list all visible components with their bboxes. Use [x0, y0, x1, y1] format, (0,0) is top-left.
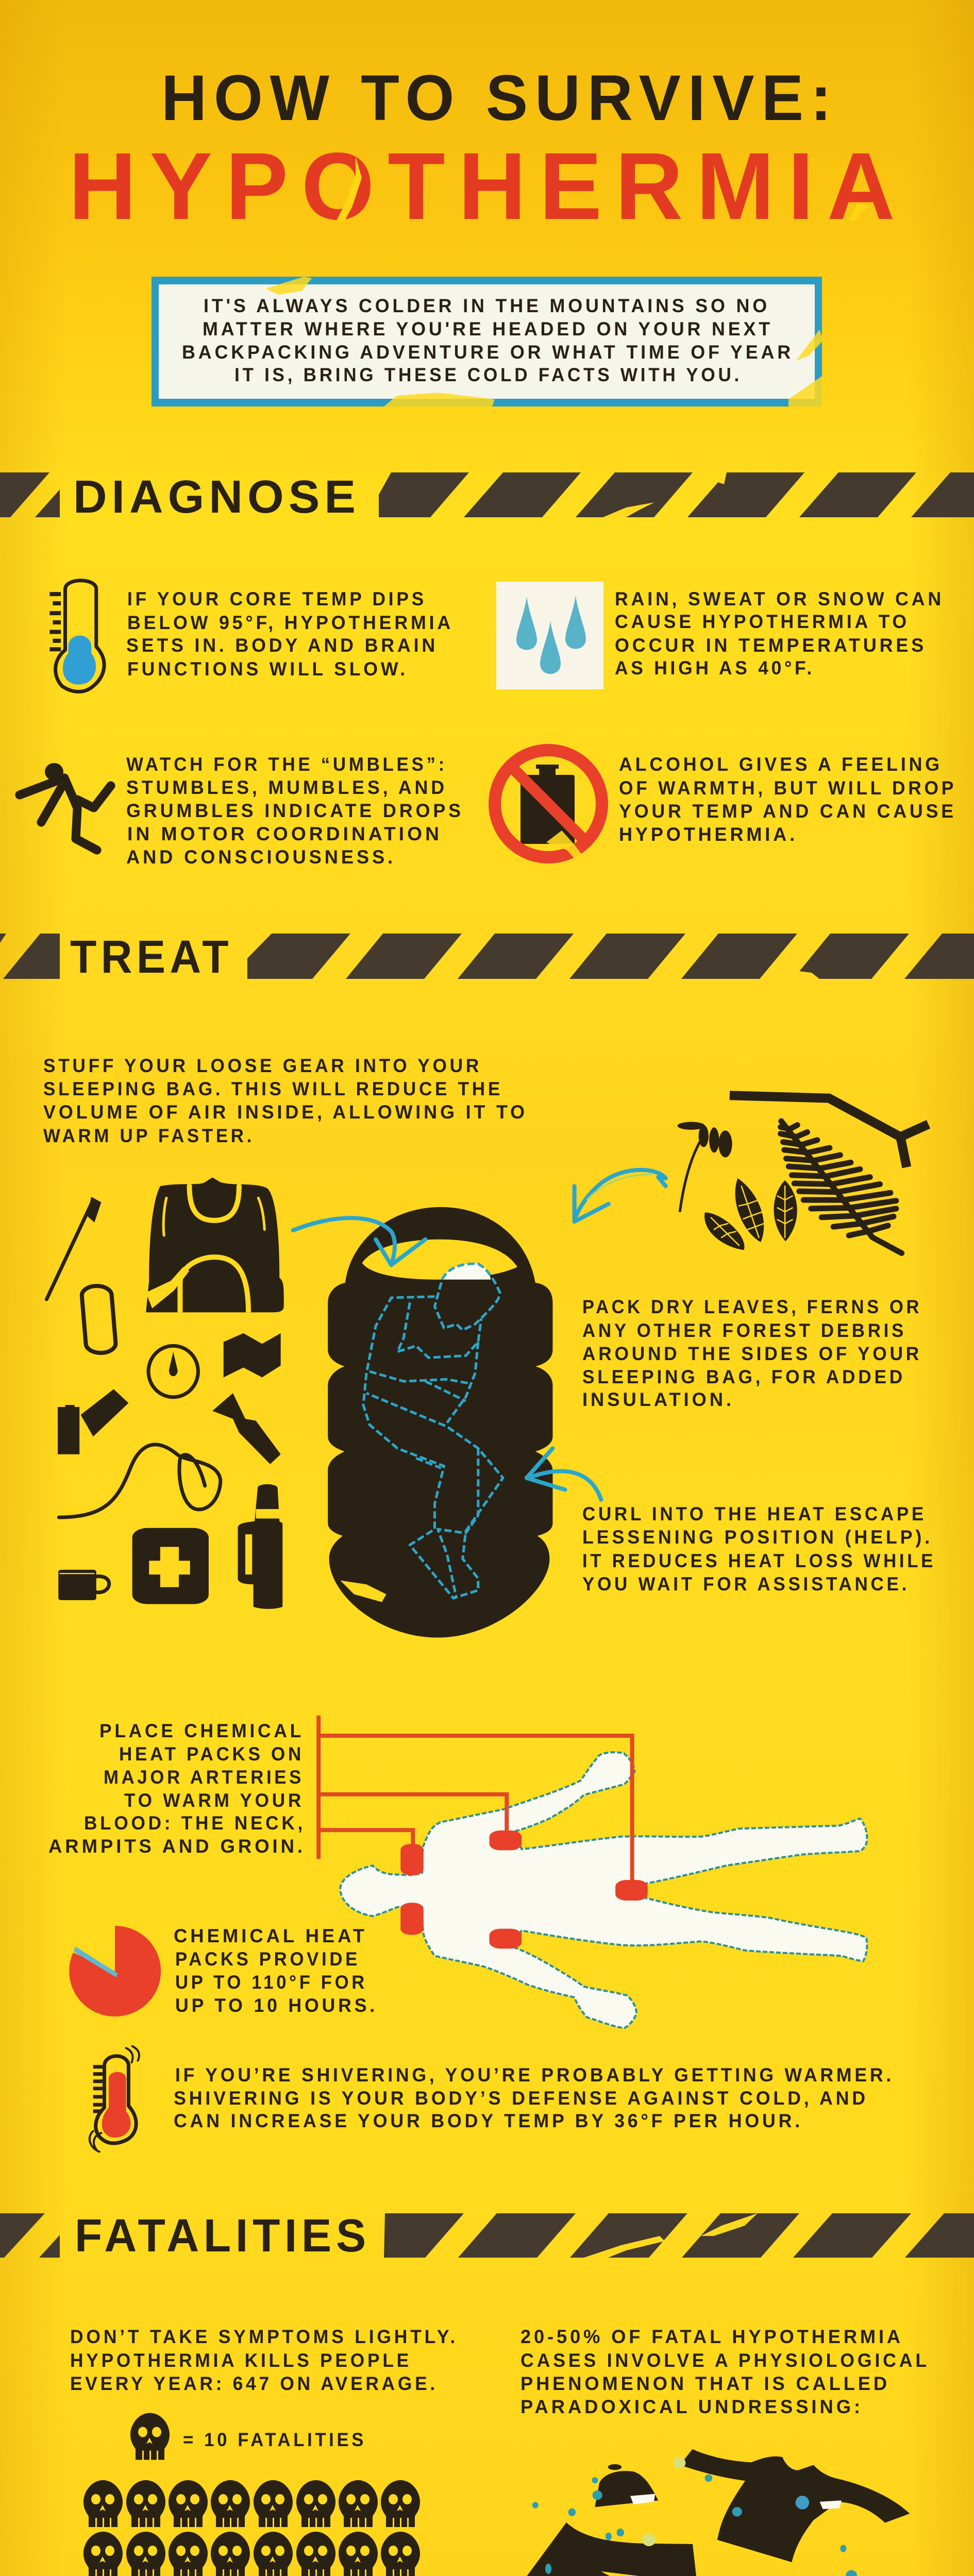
text: stuff your gear: WARM UP FASTER. [43, 1125, 255, 1146]
icon: ice axe [46, 1197, 101, 1299]
chart: skull pictogram [83, 2480, 427, 2576]
title: HYPOTHERMIA [69, 133, 908, 240]
icon: flashlight [212, 1393, 281, 1464]
fact: alcohol: YOUR TEMP AND CAN CAUSE [619, 801, 956, 822]
icon: backpack [146, 1177, 284, 1312]
icon: thermometer [49, 581, 104, 692]
text: heat pack stats: CHEMICAL HEAT [174, 1925, 367, 1946]
text: heat pack stats: UP TO 110°F FOR [175, 1972, 367, 1993]
icon: mug [58, 1570, 109, 1600]
title: HOW TO SURVIVE: [161, 62, 838, 134]
icon: pants [525, 2522, 697, 2576]
legend: skull equals ten fatalities: = 10 FATALITIES [183, 2429, 366, 2450]
text: paradoxical undressing: PARADOXICAL UNDRESSING: [520, 2396, 863, 2417]
arrow: gear into bag [293, 1218, 425, 1265]
icon: map [224, 1333, 281, 1377]
illustration: sleeping bag with person [328, 1207, 552, 1638]
text: place heat packs: BLOOD: THE NECK, [84, 1812, 306, 1834]
text: place heat packs: MAJOR ARTERIES [104, 1767, 304, 1788]
text: stuff your gear [43, 1055, 528, 1146]
arrow: debris toward bag [575, 1170, 666, 1222]
intro box: MATTER WHERE YOU'RE HEADED ON YOUR NEXT [203, 318, 773, 340]
fact: alcohol: OF WARMTH, BUT WILL DROP [619, 777, 956, 799]
body silhouette [340, 1752, 867, 2028]
icon: falling person [20, 763, 111, 850]
text: heat pack stats: UP TO 10 HOURS. [175, 1995, 378, 2016]
intro box [152, 277, 824, 406]
text: shivering: SHIVERING IS YOUR BODY’S DEFENSE AGAINST COLD, AND [174, 2088, 868, 2109]
chart: heat pack pie [69, 1926, 161, 2016]
text: symptoms: HYPOTHERMIA KILLS PEOPLE [70, 2350, 412, 2371]
text: stuff your gear: SLEEPING BAG. THIS WILL REDUCE THE [43, 1078, 503, 1099]
legend: skull equals ten fatalities [130, 2413, 366, 2460]
icons: loose gear [46, 1177, 284, 1609]
fact: rain and sweat [496, 582, 944, 689]
fact: alcohol: ALCOHOL GIVES A FEELING [619, 754, 943, 775]
person outline [363, 1264, 503, 1598]
arrow: toward curled position [527, 1448, 601, 1500]
fact: core temp: BELOW 95°F, HYPOTHERMIA [127, 612, 454, 633]
text: pack dry leaves: ANY OTHER FOREST DEBRIS [582, 1320, 906, 1341]
icon: flower [678, 1122, 732, 1211]
fact: core temp [49, 581, 454, 692]
fact: umbles: IN MOTOR COORDINATION [127, 823, 442, 844]
fact: core temp: FUNCTIONS WILL SLOW. [127, 658, 408, 680]
fact: umbles: WATCH FOR THE “UMBLES”: [126, 754, 447, 775]
fact: umbles: AND CONSCIOUSNESS. [126, 846, 396, 868]
text: place heat packs [48, 1720, 306, 1857]
icon: first aid kit [132, 1528, 209, 1604]
text: place heat packs: ARMPITS AND GROIN. [48, 1836, 306, 1857]
text: place heat packs: HEAT PACKS ON [119, 1743, 304, 1765]
text: place heat packs: PLACE CHEMICAL [99, 1720, 304, 1741]
icon: thermos [238, 1484, 282, 1609]
section banner: fatalities: FATALITIES [75, 2210, 371, 2262]
intro box: BACKPACKING ADVENTURE OR WHAT TIME OF YEAR [182, 342, 794, 363]
fact: umbles [20, 754, 464, 868]
fact: umbles: GRUMBLES INDICATE DROPS [126, 800, 464, 821]
intro box: IT'S ALWAYS COLDER IN THE MOUNTAINS SO NO [204, 295, 770, 316]
icon: compass [148, 1346, 198, 1397]
fact: rain and sweat: CAUSE HYPOTHERMIA TO [615, 611, 910, 632]
text: stuff your gear: VOLUME OF AIR INSIDE, ALLOWING IT TO [43, 1101, 528, 1123]
fact: rain and sweat: OCCUR IN TEMPERATURES [615, 635, 927, 656]
text: paradoxical undressing [520, 2326, 930, 2417]
icon: fern [781, 1121, 902, 1253]
fact: core temp: IF YOUR CORE TEMP DIPS [127, 588, 427, 609]
fact: core temp: SETS IN. BODY AND BRAIN [126, 635, 438, 656]
heat packs [400, 1831, 648, 1948]
text: heat pack stats: PACKS PROVIDE [175, 1948, 360, 1970]
icon: carabiner [81, 1285, 116, 1353]
intro box: IT IS, BRING THESE COLD FACTS WITH YOU. [234, 364, 742, 385]
text: paradoxical undressing: 20-50% OF FATAL HYPOTHERMIA [520, 2326, 903, 2347]
icon: water drops [496, 582, 603, 689]
text: curl into help: LESSENING POSITION (HELP). [582, 1527, 933, 1548]
text: pack dry leaves: AROUND THE SIDES OF YOUR [582, 1343, 922, 1364]
text: curl into help [582, 1503, 936, 1595]
text: pack dry leaves: INSULATION. [582, 1389, 734, 1410]
text: pack dry leaves [582, 1296, 922, 1410]
section banner: fatalities [0, 2210, 974, 2262]
text: symptoms: EVERY YEAR: 647 ON AVERAGE. [70, 2373, 438, 2394]
text: place heat packs: TO WARM YOUR [124, 1790, 304, 1811]
illustration: discarded clothing [525, 2449, 910, 2576]
text: heat pack stats [174, 1925, 378, 2016]
text: paradoxical undressing: PHENOMENON THAT IS CALLED [520, 2373, 890, 2394]
text: shivering: IF YOU’RE SHIVERING, YOU’RE PROBABLY GETTING WARMER. [175, 2064, 894, 2086]
text: paradoxical undressing: CASES INVOLVE A PHYSIOLOGICAL [520, 2350, 930, 2371]
icon: no flask [495, 750, 602, 860]
illustration: body with heat pack locations [318, 1716, 867, 2028]
icon: shivering thermometer [90, 2046, 139, 2151]
icon: rope [59, 1445, 221, 1517]
title [69, 62, 908, 240]
text: shivering: CAN INCREASE YOUR BODY TEMP BY 36°F PER HOUR. [174, 2110, 803, 2131]
section banner: diagnose [0, 471, 974, 523]
icons: forest debris [678, 1095, 928, 1253]
fact: rain and sweat: RAIN, SWEAT OR SNOW CAN [615, 588, 944, 609]
fact: alcohol: HYPOTHERMIA. [619, 824, 798, 845]
section banner: treat: TREAT [70, 931, 233, 983]
text: pack dry leaves: PACK DRY LEAVES, FERNS OR [582, 1296, 922, 1317]
icon: leaves [704, 1178, 797, 1250]
icon: twig [730, 1095, 928, 1167]
leader lines [318, 1716, 632, 1884]
icon: matchbox [58, 1389, 128, 1454]
text: curl into help: CURL INTO THE HEAT ESCAPE [582, 1503, 927, 1524]
section banner: diagnose: DIAGNOSE [73, 471, 360, 523]
text: shivering [174, 2064, 894, 2131]
icon: hat [595, 2464, 658, 2507]
fact: umbles: STUMBLES, MUMBLES, AND [126, 777, 447, 798]
text: curl into help: YOU WAIT FOR ASSISTANCE. [582, 1573, 910, 1595]
section banner: treat [0, 931, 974, 983]
text: stuff your gear: STUFF YOUR LOOSE GEAR INTO YOUR [43, 1055, 482, 1076]
text: symptoms [70, 2326, 458, 2394]
text: symptoms: DON’T TAKE SYMPTOMS LIGHTLY. [70, 2326, 458, 2347]
fact: alcohol [495, 750, 956, 860]
fact: rain and sweat: AS HIGH AS 40°F. [615, 657, 815, 679]
icon: sweater [680, 2449, 910, 2562]
snow droplets [532, 2457, 857, 2576]
text: curl into help: IT REDUCES HEAT LOSS WHILE [582, 1550, 936, 1571]
text: pack dry leaves: SLEEPING BAG, FOR ADDED [582, 1366, 905, 1387]
